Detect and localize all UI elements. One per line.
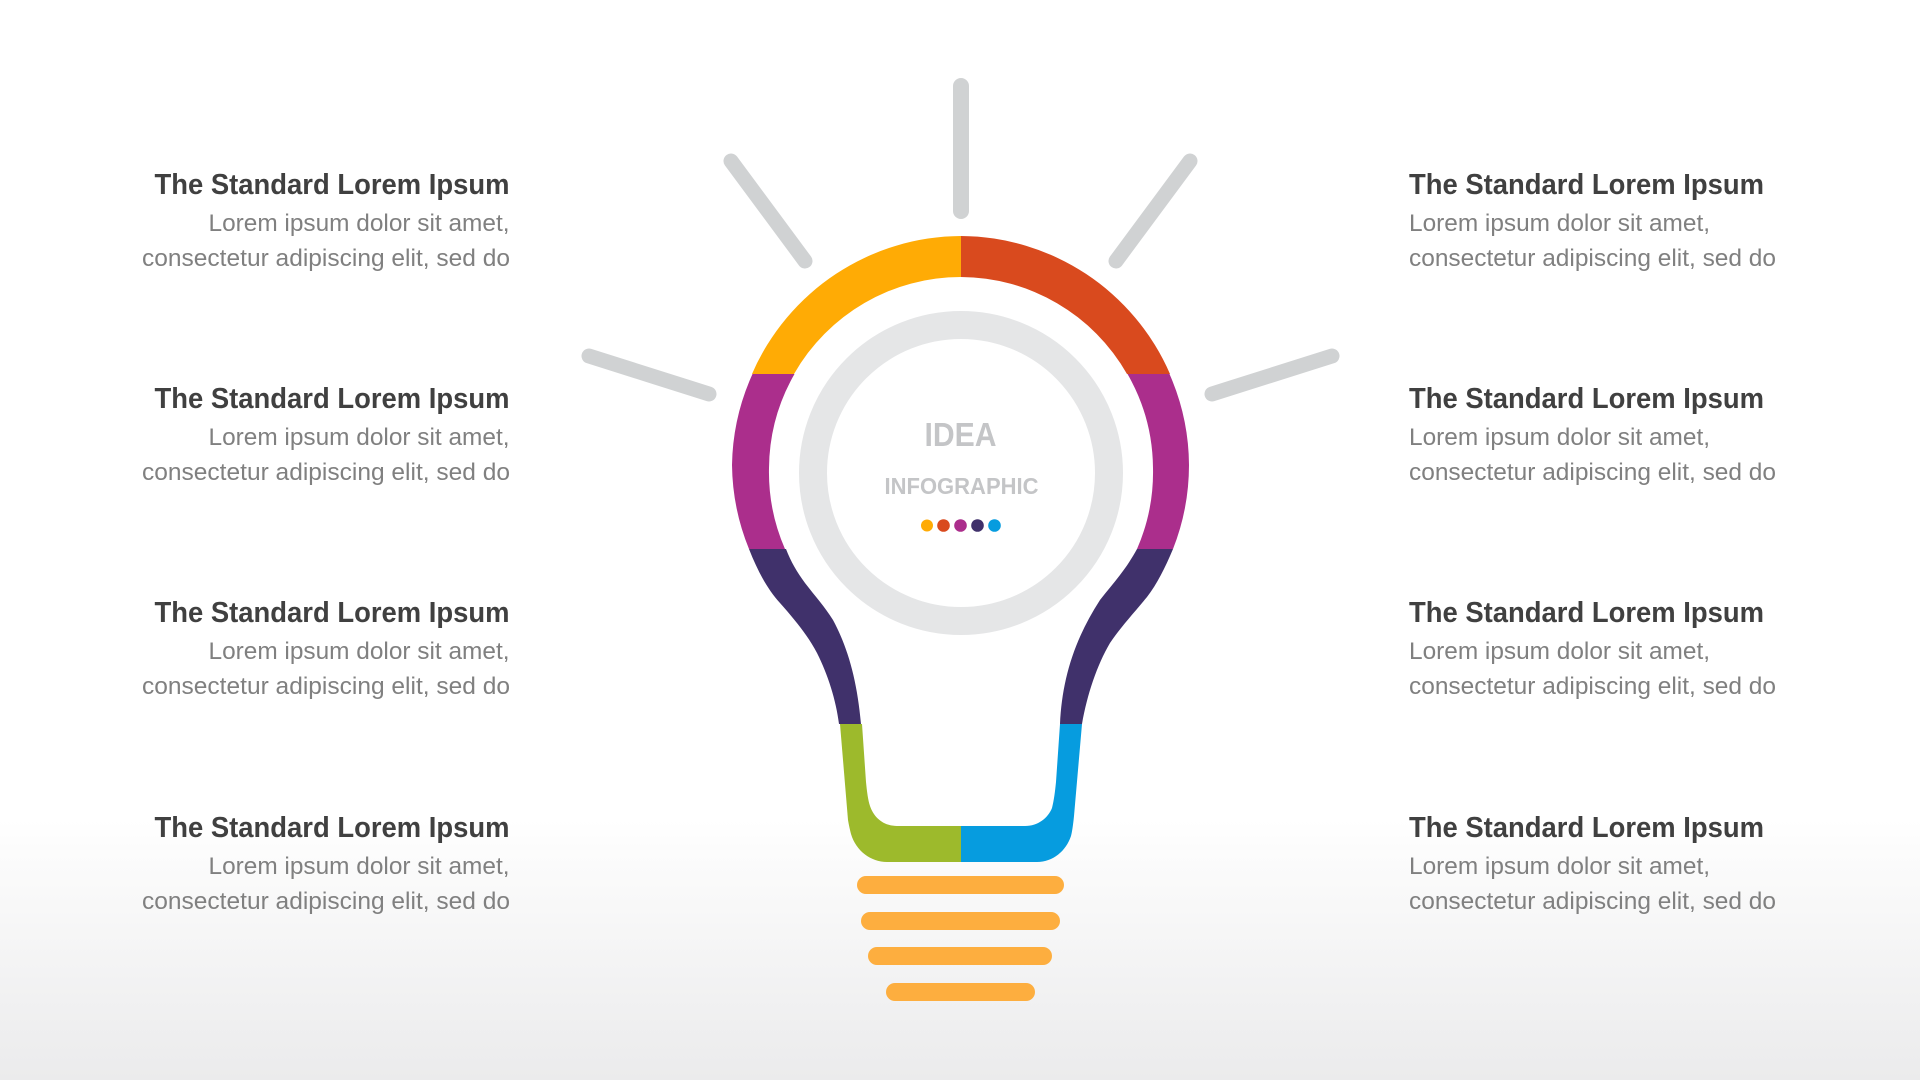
background gradient [0,820,1920,1080]
bulb segment: navy right [1060,549,1173,724]
text block: right 2: consectetur adipiscing elit, sed do [1409,459,1776,486]
text block: right 4: Lorem ipsum dolor sit amet, [1409,853,1710,880]
text block: right 1: The Standard Lorem Ipsum [1409,169,1764,201]
bulb segment: purple right [1128,374,1189,549]
text block: right 2: Lorem ipsum dolor sit amet, [1409,424,1710,451]
text block: left 4 [142,812,510,915]
text block: right 3 [1409,597,1776,700]
bulb segment: yellow [752,236,961,374]
text block: right 4 [1409,812,1776,915]
text block: left 1 [142,169,510,272]
icon: light rays [589,86,1332,394]
text block: left 2: Lorem ipsum dolor sit amet, [208,424,510,451]
bulb segment: navy left [749,549,861,724]
text block: right 1: Lorem ipsum dolor sit amet, [1409,210,1710,237]
colored dots [921,519,1001,532]
text block: right 3: Lorem ipsum dolor sit amet, [1409,638,1710,665]
bulb segment: purple left [732,374,794,549]
text block: right 1: consectetur adipiscing elit, sed do [1409,245,1776,272]
text block: left 2: The Standard Lorem Ipsum [154,383,510,415]
text block: left 2: consectetur adipiscing elit, sed do [142,459,510,486]
text block: left 1: The Standard Lorem Ipsum [154,169,510,201]
text block: right 2 [1409,383,1776,486]
text block: right 3: consectetur adipiscing elit, sed do [1409,673,1776,700]
text block: left 4: Lorem ipsum dolor sit amet, [208,853,510,880]
bulb segment: green [840,724,961,862]
text block: right 4: consectetur adipiscing elit, sed do [1409,888,1776,915]
bulb segment: orange [961,236,1170,374]
text block: left 3: The Standard Lorem Ipsum [154,597,510,629]
text block: right 1 [1409,169,1776,272]
text block: left 3: consectetur adipiscing elit, sed do [142,673,510,700]
center subheading: INFOGRAPHIC: INFOGRAPHIC [884,473,1039,499]
text block: left 1: Lorem ipsum dolor sit amet, [208,210,510,237]
text block: left 4: consectetur adipiscing elit, sed do [142,888,510,915]
text block: left 3 [142,597,510,700]
inner grey ring [813,325,1109,621]
bulb segment: blue [961,724,1082,862]
text block: right 3: The Standard Lorem Ipsum [1409,597,1764,629]
text block: left 4: The Standard Lorem Ipsum [154,812,510,844]
center heading: IDEA: IDEA [924,416,996,453]
text block: left 3: Lorem ipsum dolor sit amet, [208,638,510,665]
icon: light bulb outline [732,236,1189,862]
text block: left 1: consectetur adipiscing elit, sed do [142,245,510,272]
text block: left 2 [142,383,510,486]
icon: bulb base screw bars [857,876,1064,1001]
text block: right 2: The Standard Lorem Ipsum [1409,383,1764,415]
text block: right 4: The Standard Lorem Ipsum [1409,812,1764,844]
